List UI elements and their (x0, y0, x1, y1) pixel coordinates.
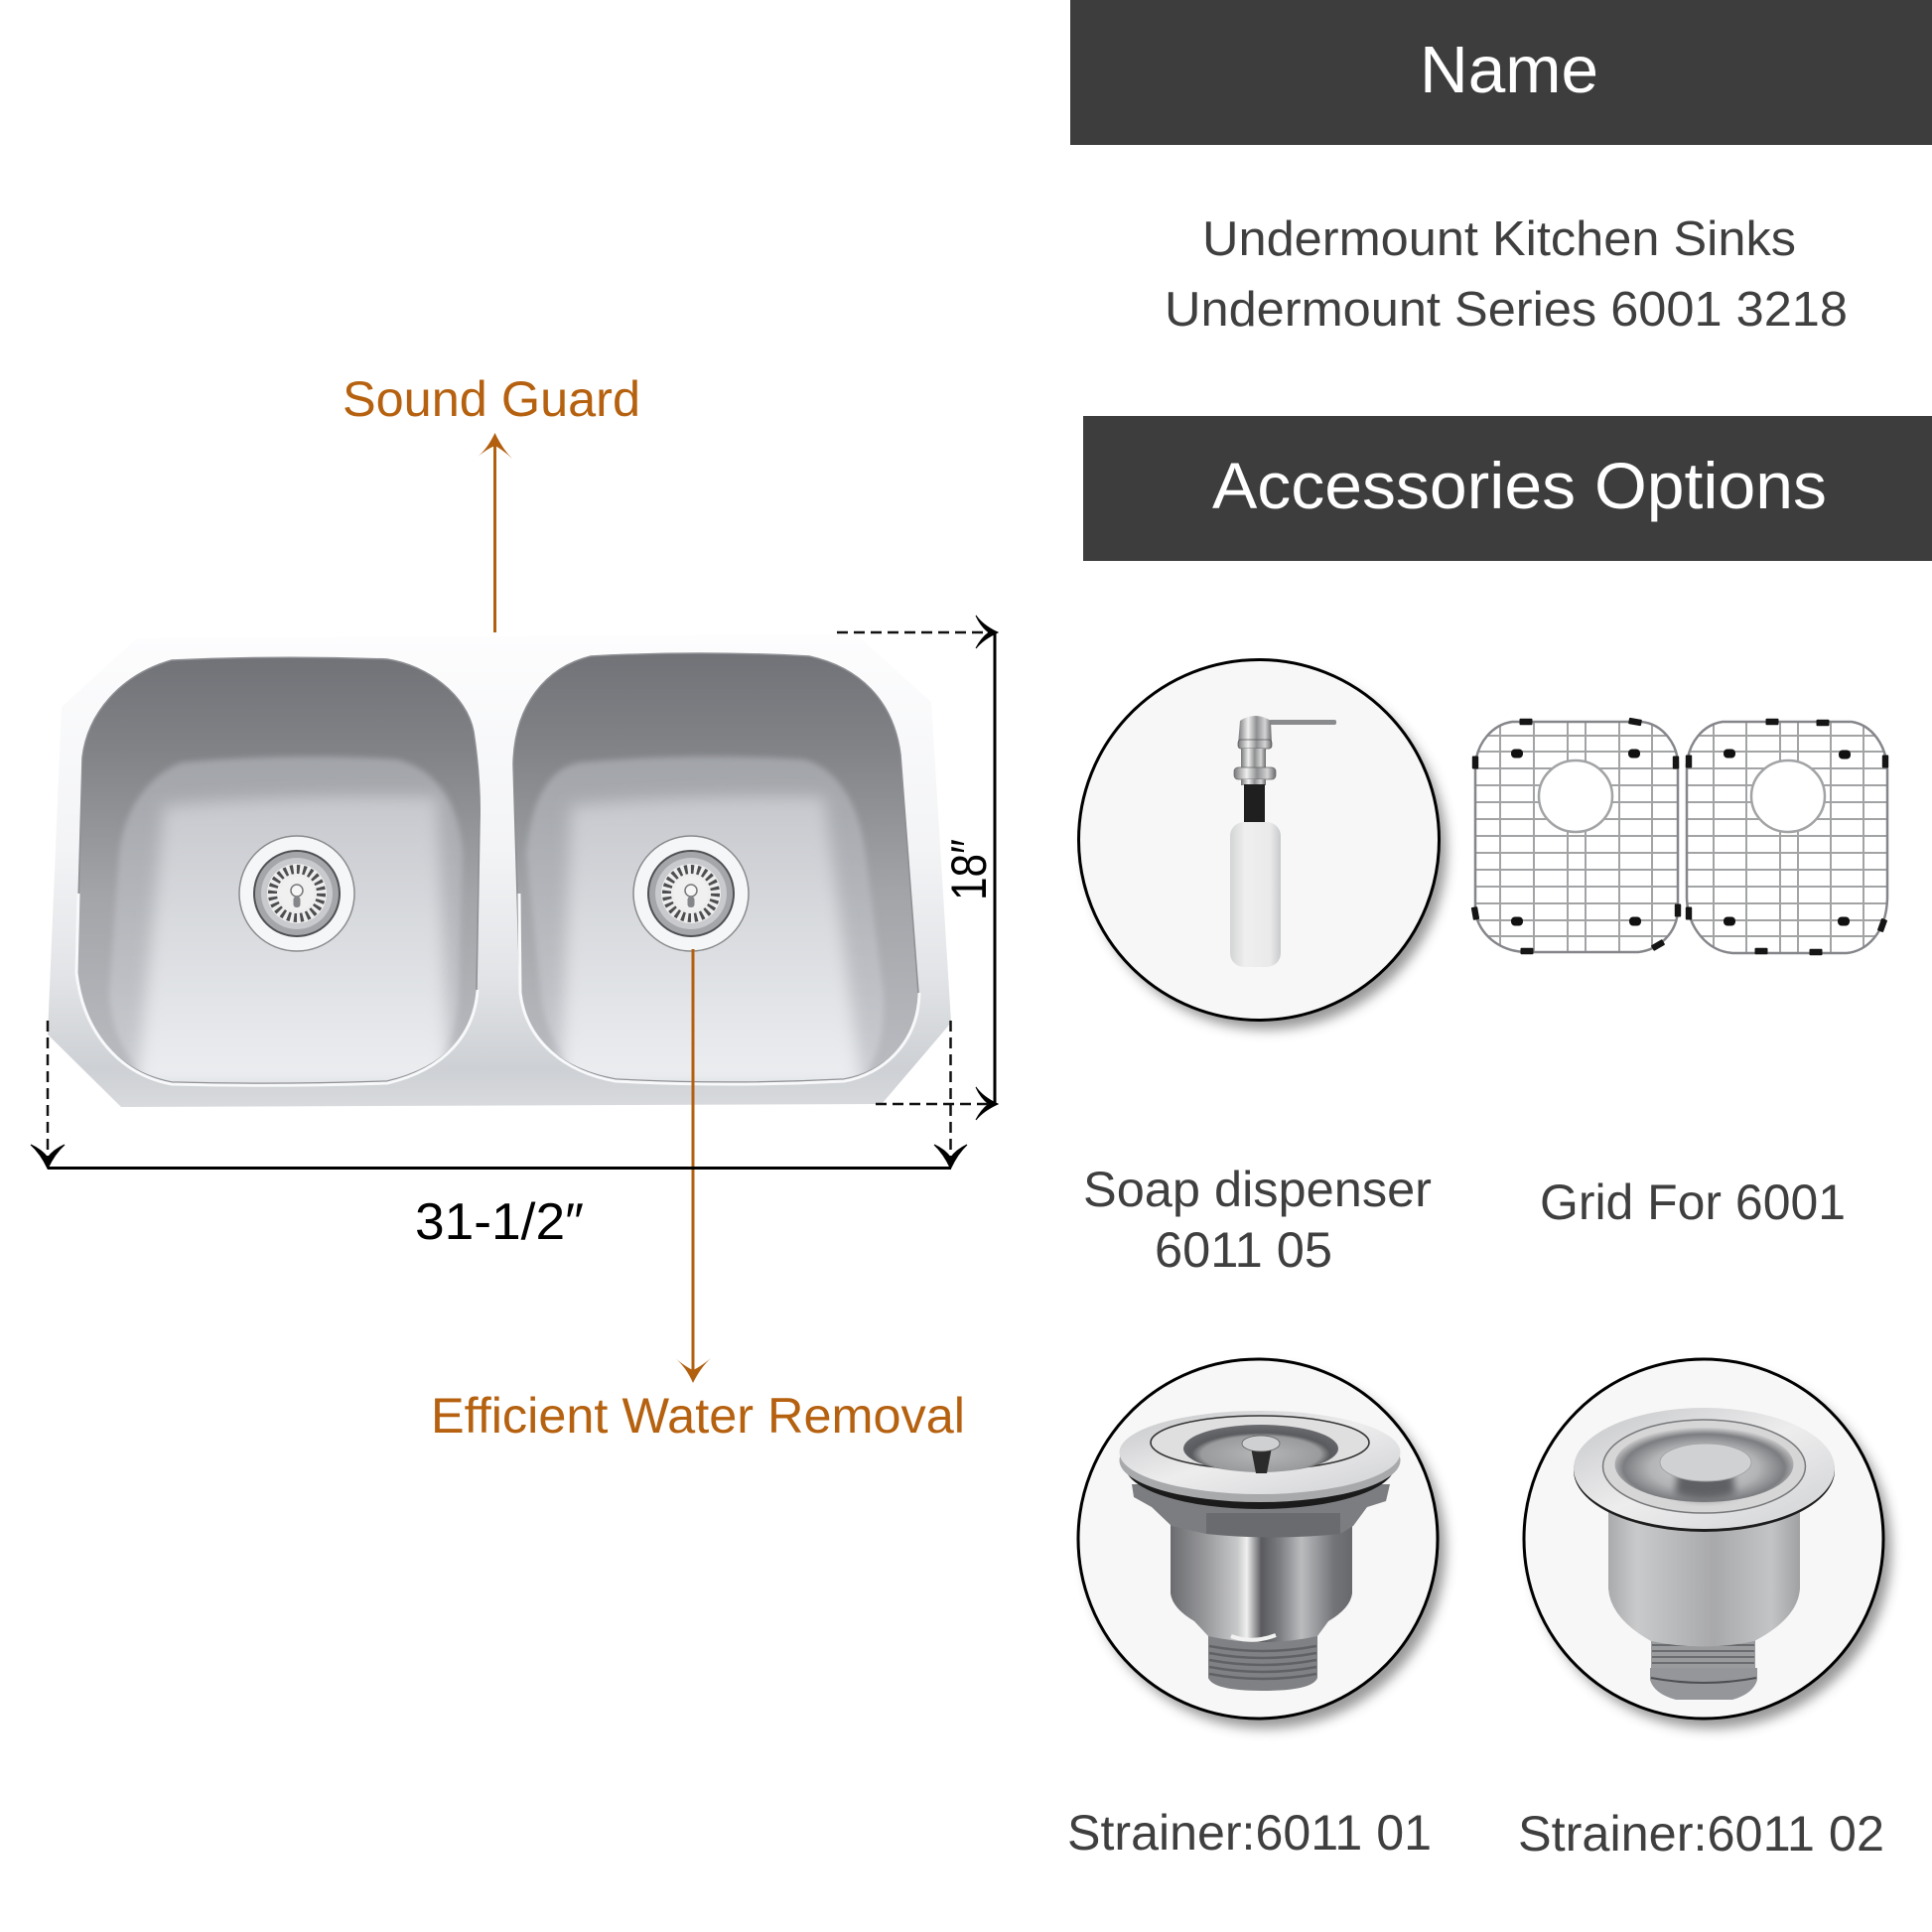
label: Soap dispenser: 6011 05 (1155, 1222, 1332, 1278)
strainer knob (1251, 1448, 1272, 1473)
sink top plate (48, 634, 951, 1107)
rim (1574, 1409, 1835, 1532)
left basin (69, 650, 486, 1092)
strainer body (1171, 1519, 1352, 1642)
accessory: sink grids (1471, 718, 1888, 955)
dispenser spout and pump (1269, 720, 1336, 725)
label: Grid For 6001: Grid For 6001 (1540, 1174, 1846, 1230)
strainer body (1608, 1504, 1800, 1646)
left grid (1474, 722, 1680, 955)
right basin (506, 645, 928, 1092)
grid feet and clips (1471, 718, 1888, 955)
left drain (239, 836, 354, 951)
dimension: depth (837, 616, 998, 1120)
rim (1120, 1419, 1400, 1502)
header bar: Name: Name (1420, 33, 1598, 107)
callout label: Sound Guard: Sound Guard (343, 371, 640, 427)
header bar: Name (1070, 0, 1932, 145)
right grid (1687, 722, 1887, 955)
accessory: strainer 6011 01 (1078, 1359, 1446, 1728)
right drain (633, 836, 749, 951)
header bar: Accessories Options (1083, 416, 1932, 561)
product name text: Undermount Series 6001 3218 (1165, 283, 1848, 337)
threaded tail and nut (1651, 1633, 1755, 1671)
threaded tail (1208, 1628, 1317, 1691)
callout arrow: Efficient Water Removal (675, 949, 711, 1383)
product name text: Undermount Kitchen Sinks (1202, 212, 1796, 266)
header bar: Accessories Options: Accessories Options (1212, 449, 1827, 522)
product name text (1165, 212, 1848, 337)
label: Strainer 6011 01: Strainer:6011 01 (1067, 1805, 1432, 1861)
sink photo (48, 634, 951, 1107)
dimension: width: 31-1/2″ (415, 1193, 584, 1251)
callout label: Efficient Water Removal: Efficient Water Removal (431, 1388, 965, 1444)
dimension: width (31, 1021, 967, 1251)
strainer cap (1675, 1467, 1735, 1499)
accessory: strainer 6011 02 (1524, 1359, 1891, 1728)
label: Soap dispenser: Soap dispenser (1083, 1162, 1432, 1217)
callout arrow: Sound Guard (478, 433, 512, 632)
label: Soap dispenser (1083, 1162, 1432, 1278)
collar (1132, 1484, 1390, 1534)
dimension: depth: 18″ (941, 839, 997, 900)
accessory: soap dispenser (1078, 659, 1447, 1030)
label: Strainer 6011 02: Strainer:6011 02 (1518, 1806, 1884, 1862)
